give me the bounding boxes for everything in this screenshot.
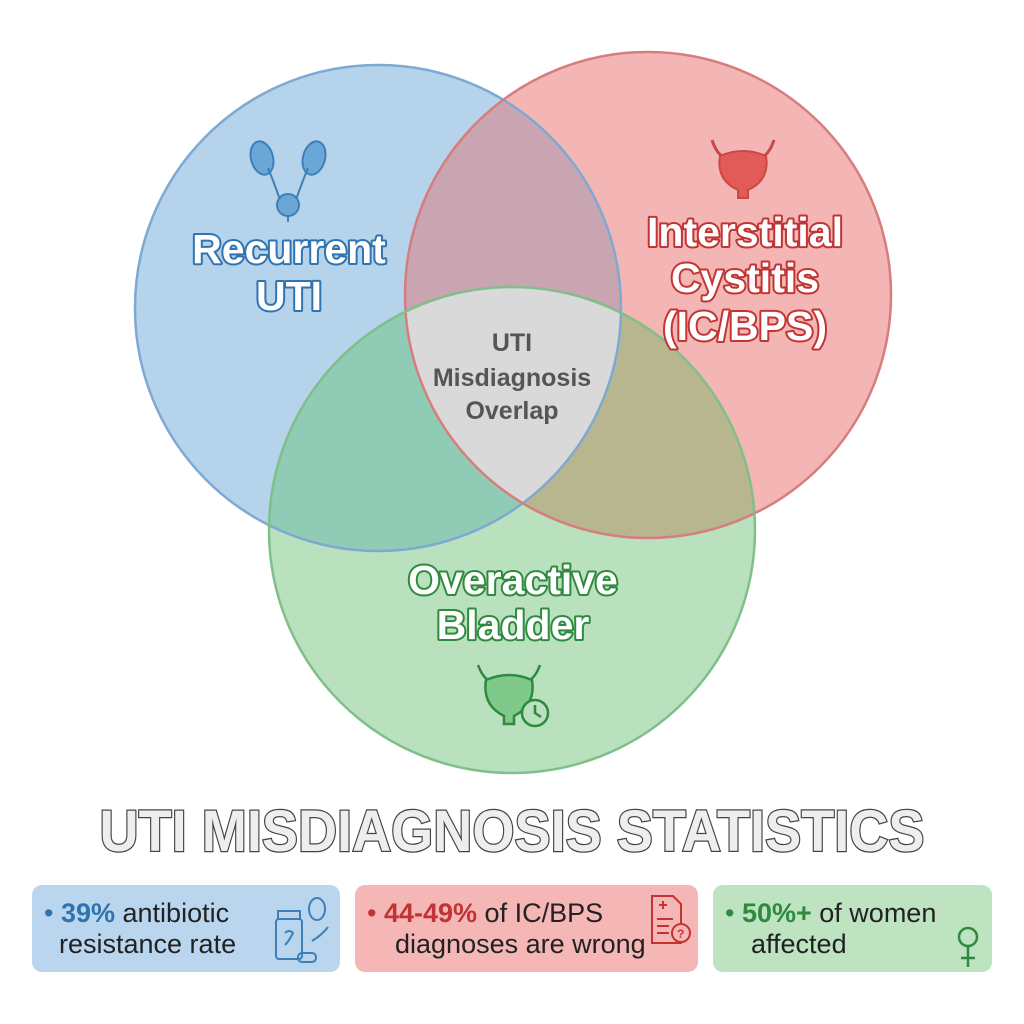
circle: overactive bladder xyxy=(269,287,755,773)
label: overactive bladder: Overactive xyxy=(408,557,618,603)
stat box: antibiotic resistance xyxy=(32,885,340,972)
label: interstitial cystitis xyxy=(647,209,843,349)
label: center overlap: UTI xyxy=(492,329,532,357)
stat box: women affected: affected xyxy=(751,929,847,959)
stat box: antibiotic resistance: • 39% antibiotic xyxy=(44,898,229,928)
icon: medical document with question: ? xyxy=(677,927,684,941)
label: center overlap: Misdiagnosis xyxy=(433,364,591,392)
label: interstitial cystitis: (IC/BPS) xyxy=(663,303,827,349)
stat box: IC/BPS wrong xyxy=(355,885,698,972)
label: recurrent UTI: Recurrent xyxy=(192,226,386,272)
label: overactive bladder: Bladder xyxy=(437,602,589,648)
label: interstitial cystitis: Interstitial xyxy=(647,209,843,255)
icon: medical document with question xyxy=(651,895,691,944)
circle: recurrent UTI xyxy=(135,65,621,551)
label: interstitial cystitis: Cystitis xyxy=(671,255,819,301)
title: UTI misdiagnosis statistics: UTI MISDIAGNOSIS STATISTICS xyxy=(100,799,924,864)
icon: female symbol xyxy=(958,926,978,967)
overlap: center xyxy=(407,288,620,502)
stat box: IC/BPS wrong: diagnoses are wrong xyxy=(395,929,646,959)
circle: interstitial cystitis xyxy=(405,52,891,538)
icon: kidneys xyxy=(247,139,329,222)
overlap: blue-red xyxy=(406,102,620,310)
stat box: women affected xyxy=(713,885,992,972)
label: center overlap xyxy=(433,329,591,425)
stat box: women affected: • 50%+ of women xyxy=(725,898,936,928)
icon: pill bottle and bacteria xyxy=(275,897,329,963)
label: recurrent UTI: UTI xyxy=(256,273,322,319)
label: center overlap: Overlap xyxy=(465,397,559,425)
stat box: IC/BPS wrong: • 44-49% of IC/BPS xyxy=(367,898,603,928)
venn diagram xyxy=(135,52,891,773)
icon: bladder red xyxy=(712,140,774,198)
stat box: antibiotic resistance: resistance rate xyxy=(59,929,236,959)
label: recurrent UTI xyxy=(192,226,386,319)
overlap: blue-green xyxy=(270,314,520,550)
icon: bladder with clock xyxy=(478,665,548,726)
label: overactive bladder xyxy=(408,557,618,648)
overlap: red-green xyxy=(525,315,753,537)
